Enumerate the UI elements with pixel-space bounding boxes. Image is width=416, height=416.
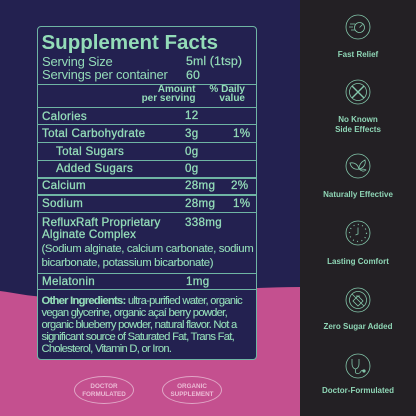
badge: doctor formulated <box>74 376 134 404</box>
value: calcium: 28mg <box>185 179 215 192</box>
row: added sugars: Added Sugars <box>56 162 133 175</box>
percent: carbohydrate: 1% <box>233 127 250 140</box>
label: lasting comfort: Lasting Comfort <box>327 257 389 266</box>
complex ingredients: bicarbonate, potassium bicarbonate) <box>42 257 213 269</box>
serving values: 5ml (1tsp) <box>186 54 242 68</box>
label: no known side effects: No Known <box>338 115 378 124</box>
icon: zero sugar added <box>346 288 370 312</box>
other ingredients <box>42 295 242 355</box>
value: melatonin: 1mg <box>186 275 209 288</box>
serving info: Servings per container <box>42 67 168 82</box>
column header: daily value: % Daily <box>209 84 245 95</box>
serving values: 60 <box>186 68 200 82</box>
label: no known side effects: Side Effects <box>335 125 381 134</box>
serving info <box>42 54 168 82</box>
icon: naturally effective <box>346 154 370 178</box>
column header: amount per serving <box>142 84 196 104</box>
row: total sugars: Total Sugars <box>56 145 124 158</box>
other ingredients: vegan glycerine, organic açaí berry powder, <box>42 307 227 319</box>
column header: daily value: value <box>219 92 245 104</box>
label: zero sugar added: Zero Sugar Added <box>323 322 393 331</box>
label: doctor-formulated: Doctor-Formulated <box>322 386 394 395</box>
complex ingredients: (Sodium alginate, calcium carbonate, sodium <box>42 243 253 255</box>
row: sodium: Sodium <box>42 197 83 210</box>
panel: benefits sidebar <box>300 0 416 416</box>
badge: doctor formulated: FORMULATED <box>82 391 126 398</box>
heading: Supplement Facts: Supplement Facts <box>42 30 218 54</box>
value: carbohydrate: 3g <box>185 127 198 140</box>
other ingredients: Cholesterol, Vitamin D, or Iron. <box>42 343 171 355</box>
other ingredients: significant source of Saturated Fat, Trans Fat, <box>42 331 234 343</box>
other ingredients: organic blueberry powder, natural flavor. Not a <box>42 319 237 331</box>
percent: sodium: 1% <box>233 197 250 210</box>
icon: doctor-formulated <box>346 354 370 378</box>
label: fast relief: Fast Relief <box>338 50 378 59</box>
column header: amount per serving: per serving <box>142 92 196 104</box>
icon: no known side effects <box>346 80 370 104</box>
badge: organic supplement <box>162 376 222 404</box>
value: added sugars: 0g <box>185 162 198 175</box>
row: calcium: Calcium <box>42 179 86 192</box>
other ingredients: Other Ingredients: ultra-purified water, organic <box>42 295 242 307</box>
value: total sugars: 0g <box>185 145 198 158</box>
value: sodium: 28mg <box>185 197 215 210</box>
label: no known side effects <box>335 115 381 134</box>
value: calories: 12 <box>185 109 198 122</box>
percent: calcium: 2% <box>231 179 248 192</box>
badge: organic supplement: SUPPLEMENT <box>170 391 214 398</box>
column header: amount per serving: Amount <box>158 84 196 95</box>
row: melatonin: Melatonin <box>42 275 95 288</box>
serving values <box>186 54 242 82</box>
row: total carbohydrate: Total Carbohydrate <box>42 127 145 140</box>
value: proprietary complex: 338mg <box>185 216 222 229</box>
row: calories: Calories <box>42 110 87 123</box>
badge: doctor formulated: DOCTOR <box>90 383 118 390</box>
complex ingredients <box>42 243 254 269</box>
panel: supplement facts table <box>37 26 257 360</box>
column header: daily value <box>209 84 245 104</box>
icon: lasting comfort <box>346 220 370 246</box>
label: naturally effective: Naturally Effective <box>323 190 393 199</box>
icon: fast relief <box>346 14 370 40</box>
serving info: Serving Size <box>42 54 113 69</box>
background: pink wave <box>0 287 300 416</box>
row: proprietary complex: RefluxRaft Proprietary <box>42 216 160 229</box>
row: proprietary complex <box>42 216 160 241</box>
badge: organic supplement: ORGANIC <box>177 383 207 390</box>
row: proprietary complex: Alginate Complex <box>42 228 136 241</box>
